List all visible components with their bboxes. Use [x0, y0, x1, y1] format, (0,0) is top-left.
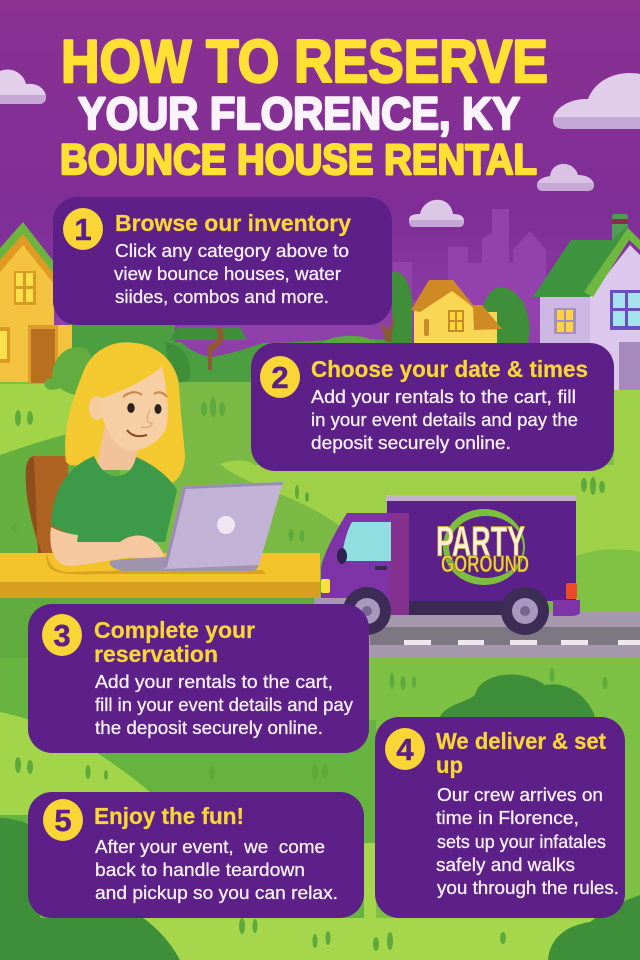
little door: [424, 319, 429, 336]
bush by house: [44, 347, 95, 396]
small bare tree: [380, 314, 396, 342]
heading 4: [436, 728, 606, 778]
left dark lower: [0, 425, 120, 553]
badge 3: 3: [53, 618, 71, 653]
window: [448, 310, 464, 332]
delivery truck: [314, 495, 580, 635]
body 2: Add your rentals to the cart, fill: [311, 386, 576, 407]
dark back hedge: [70, 320, 392, 384]
eyes: [127, 403, 135, 413]
body 4: safely and walks: [436, 854, 575, 875]
bush top right: [440, 675, 595, 717]
badge 4: 4: [396, 732, 414, 767]
body 1: [114, 240, 349, 307]
badge 2: [260, 356, 300, 398]
bush bottom left: [0, 818, 180, 960]
door handle: [375, 566, 387, 570]
mirror: [337, 548, 347, 564]
tree trunk: [208, 327, 224, 370]
lower lawn mid: [0, 658, 376, 960]
clouds: [0, 69, 640, 227]
logo: [436, 509, 529, 585]
nose: [141, 410, 152, 427]
woman with laptop: [0, 342, 320, 598]
middle house: [411, 280, 502, 343]
heading 1: Browse our inventory: [115, 210, 351, 236]
rear bumper: [553, 600, 580, 616]
body 5: After your event, we come: [95, 836, 325, 857]
small bush: [322, 336, 376, 343]
cloud small title: [537, 164, 594, 191]
step 5 panel: [28, 792, 364, 918]
body 4: Our crew arrives on: [437, 784, 603, 805]
green roof: [533, 225, 628, 297]
body 5: [95, 836, 338, 903]
left light hill lower: [0, 712, 150, 815]
bush right of mid house: [481, 287, 529, 345]
badge 2: 2: [271, 360, 289, 395]
cab: [321, 513, 409, 615]
step 3 panel: [28, 604, 369, 753]
eyebrows: [123, 392, 167, 397]
right hill: [220, 390, 640, 556]
body 1: siides, combos and more.: [115, 286, 329, 307]
under desk band: [0, 598, 330, 658]
body 4: you through the rules.: [437, 877, 619, 898]
body 4: sets up your infatales: [437, 831, 606, 852]
body 2: in your event details and pay the: [311, 409, 578, 430]
laptop base: [110, 557, 258, 571]
roof: [0, 222, 54, 278]
body 1: view bounce houses, water: [114, 263, 341, 284]
left light hill: [0, 384, 120, 455]
neck: [96, 425, 137, 470]
road dashes: [404, 640, 640, 645]
skyline: [393, 209, 590, 345]
title line 3: BOUNCE HOUSE RENTAL: [60, 136, 537, 184]
body 4: time in Florence,: [436, 807, 579, 828]
body 2: [311, 386, 578, 453]
body 5: back to handle teardown: [95, 859, 305, 880]
badge 4: [385, 728, 425, 770]
left yellow house: [0, 222, 72, 383]
walls: [414, 288, 497, 343]
yellow window: [554, 308, 576, 334]
badge 5: 5: [54, 803, 72, 838]
heading 5: Enjoy the fun!: [94, 803, 244, 829]
chair: [26, 456, 68, 553]
cloud right: [553, 73, 640, 129]
purple ground haze: [170, 325, 640, 350]
title: [60, 28, 548, 184]
rear wheel: [501, 587, 549, 635]
chassis: [408, 601, 533, 615]
hair: [65, 342, 185, 483]
lower lawn right: [369, 658, 640, 960]
title line 2: YOUR FLORENCE, KY: [78, 88, 520, 139]
laptop logo: [217, 516, 235, 534]
body 4: [436, 784, 619, 898]
body 1: Click any category above to: [115, 240, 349, 261]
laptop screen: [163, 482, 283, 569]
grass tufts: [12, 397, 608, 951]
heading 4: We deliver & set: [436, 728, 606, 754]
tail light: [566, 583, 577, 599]
heading 2: Choose your date & times: [311, 356, 588, 382]
front wheel: [343, 587, 391, 635]
step 2 panel: [251, 343, 614, 471]
cab window: [342, 522, 391, 561]
step 1 panel: [53, 197, 392, 325]
walls: [540, 296, 590, 388]
mid lawn behind laptop: [170, 382, 340, 560]
body 3: Add your rentals to the cart,: [95, 671, 333, 692]
road: [315, 612, 640, 658]
body 2: deposit securely online.: [311, 432, 511, 453]
heading 3: [94, 617, 255, 667]
cloud mid: [409, 200, 464, 227]
logo PARTY: PARTY: [436, 518, 525, 566]
body 3: [95, 671, 354, 738]
bush behind hair: [165, 342, 190, 382]
arm: [50, 527, 163, 566]
chimney: [612, 214, 628, 244]
ear: [89, 396, 105, 420]
badge 5: [43, 799, 83, 841]
bush bottom right: [548, 895, 640, 960]
blue window: [610, 290, 640, 330]
headlight: [321, 579, 330, 593]
tree crown: [170, 327, 247, 340]
tree middle: [392, 272, 412, 345]
cargo box: [387, 495, 576, 601]
base lawn: [0, 382, 640, 960]
smile: [127, 430, 147, 436]
front bumper: [314, 598, 354, 606]
logo ring: [443, 509, 525, 585]
window: [14, 271, 36, 305]
cloud left: [0, 69, 46, 104]
badge 1: 1: [74, 212, 92, 247]
grass background: [0, 320, 640, 960]
right lilac house: [533, 214, 640, 390]
body 3: the deposit securely online.: [95, 717, 323, 738]
right lower lawn: [576, 549, 640, 612]
heading 3: reservation: [94, 641, 218, 667]
door: [619, 342, 640, 390]
logo GO ROUND: GOROUND: [441, 551, 529, 578]
badge 3: [42, 614, 82, 656]
body 3: fill in your event details and pay: [95, 694, 354, 715]
side window: [0, 327, 10, 363]
heading 3: Complete your: [94, 617, 255, 643]
body 5: and pickup so you can relax.: [95, 882, 338, 903]
sky background: [0, 0, 640, 360]
desk shadow: [47, 553, 266, 574]
badge 1: [63, 208, 103, 250]
title line 1: HOW TO RESERVE: [61, 28, 548, 95]
face: [102, 366, 168, 451]
heading 4: up: [436, 752, 463, 778]
roof trim: [584, 228, 640, 297]
bottom light: [143, 843, 640, 960]
door: [28, 325, 58, 383]
wall: [0, 236, 72, 382]
shirt: [51, 456, 177, 542]
desk: [0, 553, 320, 598]
roof: [411, 280, 502, 330]
step 4 panel: [375, 717, 625, 918]
